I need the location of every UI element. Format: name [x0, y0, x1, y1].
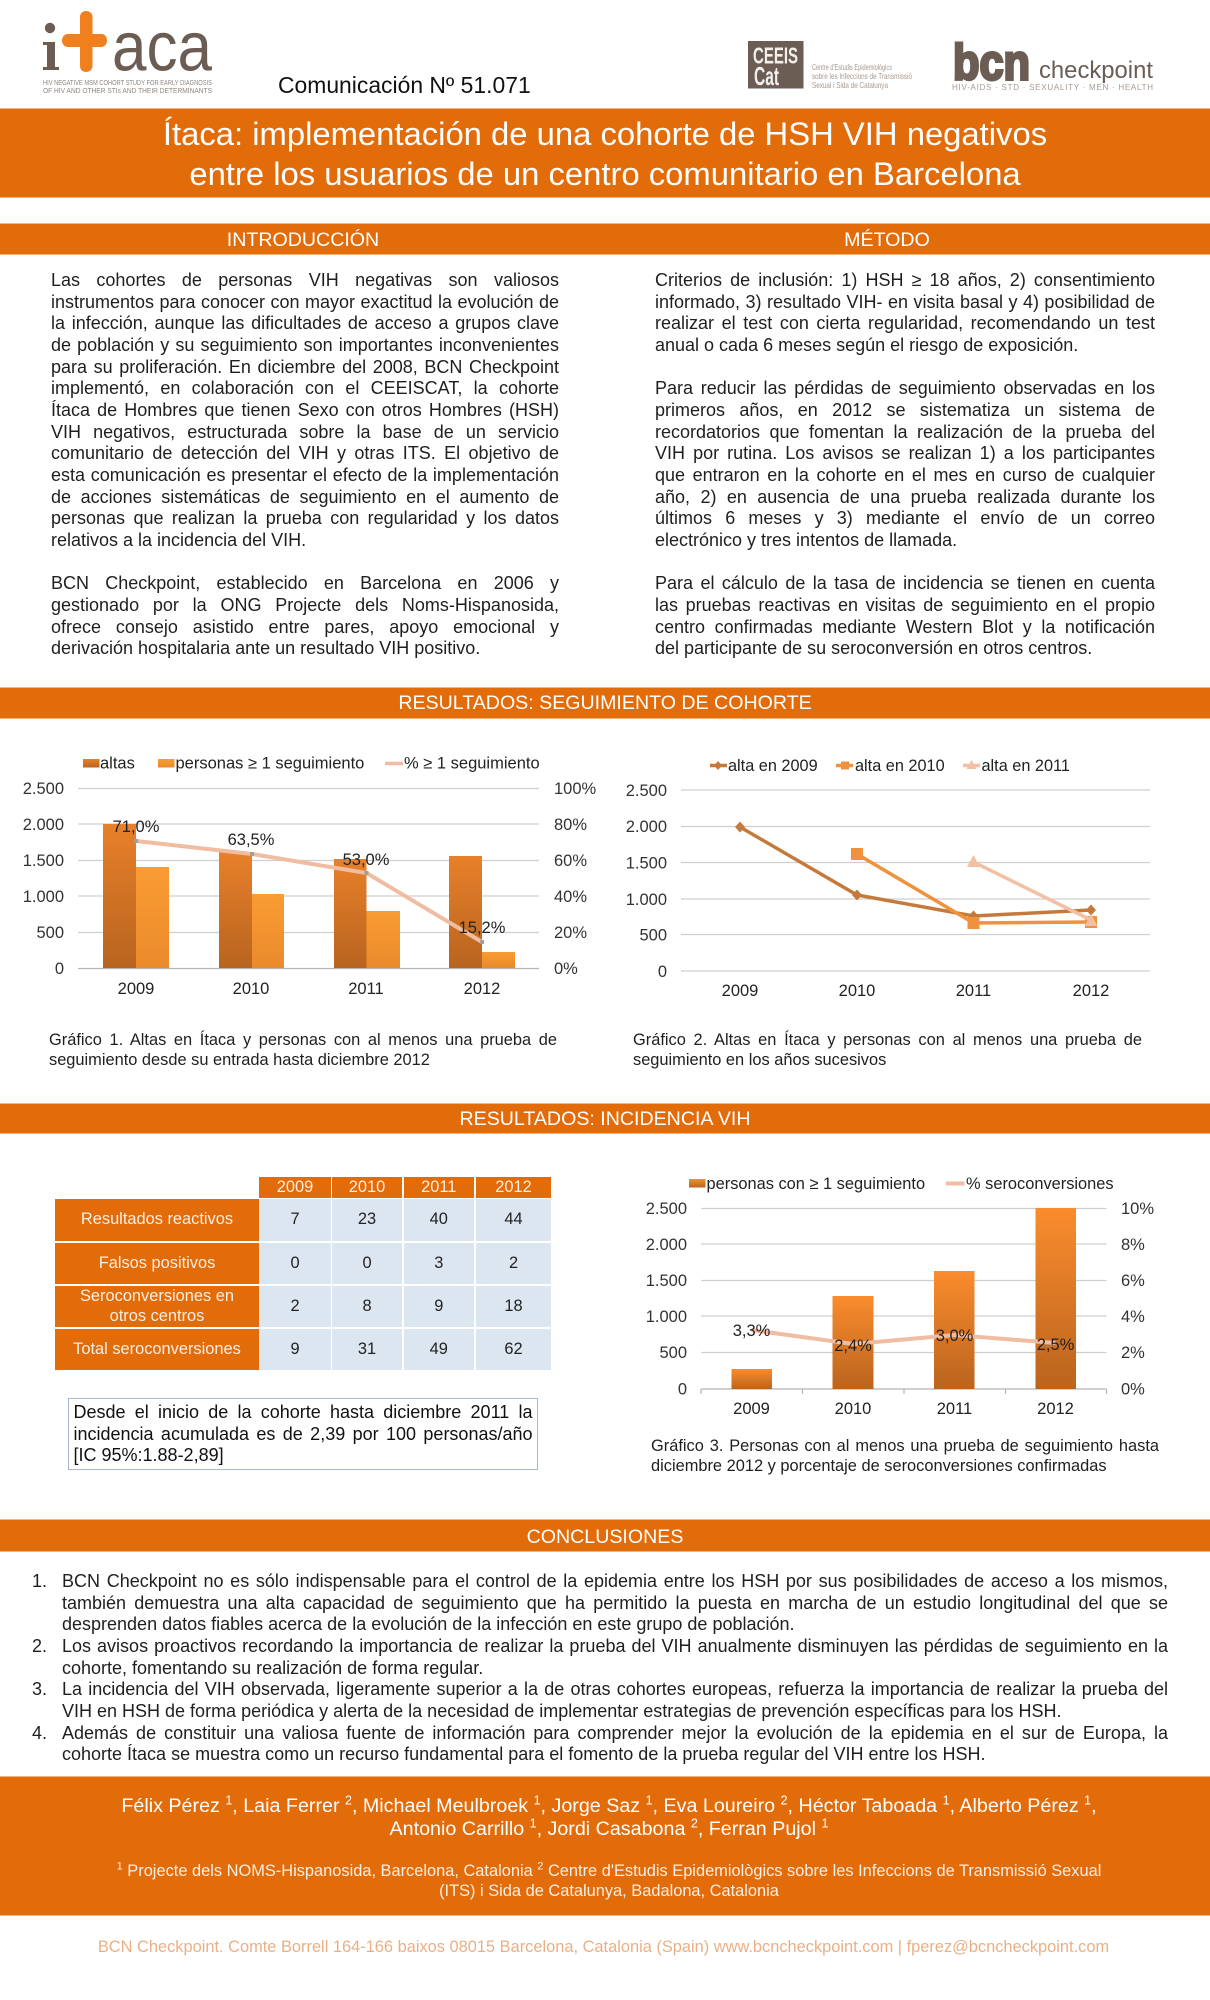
- callout: incidencia acumulada: [68, 1398, 538, 1470]
- left axis: 2.000: [646, 1236, 687, 1254]
- series: alta en 2011: [967, 855, 1098, 926]
- conclusion 4: cohorte Ítaca se muestra como un recurso fundamental para el fomento de la prueba regular del VIH entre los HSH.: [62, 1744, 986, 1764]
- x axis labels: 2012: [1073, 982, 1109, 1000]
- bars: altas: [103, 824, 482, 968]
- conclusion 1: 1.: [32, 1571, 47, 1591]
- left axis: 500: [36, 924, 64, 942]
- row: seroconversiones en otros centros: [55, 1286, 551, 1327]
- legend: alta en 2010: [855, 757, 945, 775]
- row: falsos positivos: [55, 1243, 551, 1284]
- legend: alta en 2009: [728, 757, 818, 775]
- x axis labels: [722, 982, 1109, 1000]
- authors band: [0, 1776, 1210, 1916]
- conclusion 2: cohorte, fomentando su realización de forma regular.: [62, 1658, 483, 1678]
- text block: introducción: ofrece consejo asistido entre pares, apoyo emocional y: [51, 617, 559, 637]
- caption: gráfico 3: [651, 1437, 1159, 1475]
- logo: itaca: aca: [112, 8, 212, 86]
- text block: método: año, 2) en ausencia de una prueba realizada durante los: [655, 487, 1155, 507]
- left axis: 1.500: [646, 1272, 687, 1290]
- logo: CEEISCat: [748, 41, 912, 91]
- legend: [710, 757, 1070, 775]
- text block: método: recordatorios que fomentan la realización de la prueba del: [655, 422, 1155, 442]
- text block: método: VIH por rutina. Los avisos se realizan 1) a los participantes: [655, 443, 1155, 463]
- x axis labels: 2009: [118, 980, 154, 998]
- callout: incidencia acumulada: Desde el inicio de la cohorte hasta diciembre 2011 la: [74, 1402, 532, 1422]
- table header: 2009: [277, 1178, 313, 1196]
- data labels: 71,0%: [113, 818, 160, 836]
- conclusion 2: 2.: [32, 1636, 47, 1656]
- left axis: 1.500: [626, 854, 667, 872]
- text block: método: [655, 270, 1155, 658]
- legend: altas: [100, 754, 135, 772]
- text block: introducción: BCN Checkpoint, establecido en Barcelona en 2006 y: [51, 573, 559, 593]
- data labels: 2,4%: [834, 1337, 872, 1355]
- x axis labels: 2010: [835, 1400, 871, 1418]
- caption: gráfico 2: [633, 1030, 1142, 1069]
- right axis: 0%: [1121, 1380, 1145, 1398]
- text block: introducción: de acciones sistemáticas de seguimiento en el aumento de: [51, 487, 559, 507]
- x axis labels: 2009: [722, 982, 758, 1000]
- right axis: 100%: [554, 780, 597, 798]
- row: resultados reactivos: 23: [358, 1210, 376, 1228]
- left axis: 0: [55, 960, 64, 978]
- caption: gráfico 1: [49, 1030, 557, 1069]
- row: total seroconversiones: 62: [504, 1340, 523, 1358]
- text block: introducción: comunitario de detección del VIH y otras ITS. El objetivo de: [51, 443, 559, 463]
- x axis labels: 2010: [839, 982, 875, 1000]
- title: Ítaca: implementación de una cohorte de HSH VIH negativos: [163, 115, 1047, 152]
- text block: introducción: implementó, en colaboración con el CEEISCAT, la cohorte: [51, 378, 559, 398]
- text block: introducción: derivación hospitalaria ante un resultado VIH positivo.: [51, 638, 480, 658]
- x axis labels: 2012: [1037, 1400, 1074, 1418]
- right axis: 80%: [554, 816, 587, 834]
- right axis: 6%: [1121, 1272, 1145, 1290]
- row: falsos positivos: 0: [290, 1254, 300, 1272]
- affiliations: 1 Projecte dels NOMS-Hispanosida, Barcelona, Catalonia 2 Centre d'Estudis Epidemiològics sobre les Infeccions de Transmissió Sexual: [117, 1861, 1101, 1880]
- row: total seroconversiones: [55, 1329, 551, 1370]
- row: seroconversiones en otros centros: 9: [434, 1297, 443, 1315]
- legend: % ≥ 1 seguimiento: [404, 754, 540, 772]
- conclusion 4: 4.: [32, 1723, 47, 1743]
- left axis: 2.000: [23, 816, 64, 834]
- row: resultados reactivos: Resultados reactivos: [81, 1210, 233, 1228]
- text block: método: del participante de su seroconversión en otros centros.: [655, 638, 1092, 658]
- text block: introducción: esta comunicación es presentar el efecto de la implementación: [51, 465, 559, 485]
- text block: método: anual o cada 6 meses según el riesgo de exposición.: [655, 335, 1078, 355]
- left axis: [23, 780, 64, 978]
- left axis: [646, 1200, 687, 1398]
- row: falsos positivos: 2: [509, 1254, 518, 1272]
- row: seroconversiones en otros centros: 8: [362, 1297, 372, 1315]
- series: alta en 2010: [851, 848, 1097, 929]
- title: entre los usuarios de un centro comunitario en Barcelona: [189, 154, 1021, 192]
- row: total seroconversiones: 9: [290, 1340, 300, 1358]
- text block: método: realizar el test con cierta regularidad, recomendando un test: [655, 313, 1155, 333]
- row: resultados reactivos: 40: [430, 1210, 448, 1228]
- logo: CEEISCat: sobre les Infeccions de Transmissió: [812, 71, 912, 81]
- conclusion 3: [32, 1679, 1168, 1721]
- legend: personas con ≥ 1 seguimiento: [706, 1175, 925, 1193]
- caption: gráfico 3: Gráfico 3. Personas con al menos una prueba de seguimiento hasta: [651, 1437, 1159, 1455]
- row: seroconversiones en otros centros: 2: [290, 1297, 300, 1315]
- text block: método: Criterios de inclusión: 1) HSH ≥ 18 años, 2) consentimiento: [655, 270, 1155, 290]
- right axis: 2%: [1121, 1344, 1145, 1362]
- legend: personas ≥ 1 seguimiento: [176, 754, 364, 772]
- communication number: Comunicación Nº 51.071: [278, 72, 531, 98]
- heading: seguimiento de cohorte: RESULTADOS: SEGUIMIENTO DE COHORTE: [398, 692, 812, 714]
- left axis: 2.000: [626, 818, 667, 836]
- data labels: 53,0%: [343, 851, 390, 869]
- data labels: 3,0%: [936, 1327, 974, 1345]
- conclusion 1: también demuestra una alta capacidad de seguimiento que ha permitido la puesta en marcha de un estudio longitudinal del que se: [62, 1593, 1168, 1613]
- text block: introducción: instrumentos para conocer con mayor exactitud la evolución de: [51, 292, 559, 312]
- affiliations: (ITS) i Sida de Catalunya, Badalona, Catalonia: [439, 1882, 779, 1900]
- section band: resultados incidencia: [0, 1103, 1210, 1134]
- right axis: 10%: [1121, 1200, 1154, 1218]
- left axis: 0: [678, 1380, 687, 1398]
- series: alta en 2009: [735, 822, 1096, 922]
- left axis: 1.000: [646, 1308, 687, 1326]
- text block: método: las pruebas reactivas en visitas de seguimiento en el propio: [655, 595, 1155, 615]
- line: porcentaje: [134, 839, 484, 944]
- text block: introducción: relativos a la incidencia del VIH.: [51, 530, 306, 550]
- text block: introducción: gestionado por la ONG Projecte dels Noms-Hispanosida,: [51, 595, 559, 615]
- text block: introducción: la infección, aunque las dificultades de acceso a grupos clave: [51, 313, 559, 333]
- logo: bcn checkpoint: [952, 34, 1153, 92]
- authors: [121, 1793, 1097, 1840]
- conclusion 1: desprenden datos fiables acerca de la evolución de la infección en este grupo de población.: [62, 1614, 795, 1634]
- caption: gráfico 1: Gráfico 1. Altas en Ítaca y personas con al menos una prueba de: [49, 1031, 557, 1049]
- conclusion 3: 3.: [32, 1679, 47, 1699]
- right axis: 60%: [554, 852, 587, 870]
- caption: gráfico 2: Gráfico 2. Altas en Ítaca y personas con al menos una prueba de: [633, 1031, 1142, 1049]
- chart 2: altas por año: [626, 757, 1150, 1000]
- row: falsos positivos: 3: [434, 1254, 443, 1272]
- text block: introducción: VIH negativos, estructurada sobre la base de un servicio: [51, 422, 559, 442]
- left axis: 2.500: [626, 782, 667, 800]
- text block: introducción: de población y su seguimiento son importantes inconvenientes: [51, 335, 559, 355]
- left axis: 1.500: [23, 852, 64, 870]
- row: seroconversiones en otros centros: otros centros: [110, 1306, 204, 1324]
- data labels: [113, 818, 506, 937]
- left axis: 1.000: [626, 891, 667, 909]
- conclusion 3: La incidencia del VIH observada, ligeramente superior a la de otras cohortes europeas, refuerza la importancia de realizar la prueba del: [62, 1679, 1168, 1699]
- authors: Félix Pérez 1, Laia Ferrer 2, Michael Meulbroek 1, Jorge Saz 1, Eva Loureiro 2, Héctor Taboada 1, Alberto Pérez 1,: [121, 1793, 1097, 1816]
- legend: [83, 754, 540, 772]
- conclusion 3: VIH en HSH de forma periódica y alerta de la necesidad de implementar estrategias de prevención específicas para los HSH.: [62, 1701, 1062, 1721]
- conclusion 2: [32, 1636, 1168, 1678]
- title banner: [0, 108, 1210, 198]
- conclusion 4: Además de constituir una valiosa fuente de información para comprender mejor la evolución de la epidemia en el sur de Europa, la: [62, 1723, 1168, 1743]
- authors: Antonio Carrillo 1, Jordi Casabona 2, Ferran Pujol 1: [390, 1816, 828, 1840]
- x axis labels: 2011: [937, 1400, 972, 1418]
- text block: introducción: [51, 270, 559, 658]
- text block: método: informado, 3) resultado VIH- en visita basal y 4) posibilidad de: [655, 292, 1155, 312]
- text block: introducción: para su proliferación. En diciembre del 2008, BCN Checkpoint: [51, 357, 559, 377]
- text block: método: Para reducir las pérdidas de seguimiento observadas en los: [655, 378, 1155, 398]
- row: resultados reactivos: 44: [504, 1210, 523, 1228]
- text block: conclusiones: [32, 1571, 1168, 1764]
- x axis labels: 2011: [348, 980, 384, 998]
- row: resultados reactivos: 7: [290, 1210, 300, 1228]
- chart 3: personas y seroconversiones: [646, 1175, 1154, 1418]
- heading: método: MÉTODO: [844, 229, 930, 251]
- heading: introducción: INTRODUCCIÓN: [227, 229, 379, 251]
- row: total seroconversiones: 31: [358, 1340, 376, 1358]
- left axis: 2.500: [646, 1200, 687, 1218]
- logo: CEEISCat: Centre d'Estudis Epidemiològics: [812, 62, 892, 72]
- data labels: [733, 1322, 1075, 1355]
- callout: incidencia acumulada: [IC 95%:1.88-2,89]: [74, 1445, 224, 1465]
- text block: método: primeros años, en 2012 se sistematiza un sistema de: [655, 400, 1155, 420]
- row: falsos positivos: 0: [362, 1254, 372, 1272]
- logo: CEEISCat: CEEIS: [753, 42, 798, 68]
- table header: [259, 1177, 551, 1198]
- data labels: 15,2%: [459, 919, 506, 937]
- text block: método: Para el cálculo de la tasa de incidencia se tienen en cuenta: [655, 573, 1155, 593]
- x axis labels: 2009: [733, 1400, 770, 1418]
- logo: bcn checkpoint: HIV-AIDS · STD · SEXUALITY · MEN · HEALTH: [952, 83, 1153, 92]
- table header: 2010: [349, 1178, 385, 1196]
- logo: itaca: OF HIV AND OTHER STIs AND THEIR DETERMINANTS: [43, 86, 212, 95]
- caption: gráfico 1: seguimiento desde su entrada hasta diciembre 2012: [49, 1051, 430, 1069]
- x axis labels: 2010: [233, 980, 269, 998]
- row: resultados reactivos: [55, 1199, 551, 1241]
- x axis labels: 2011: [956, 982, 991, 1000]
- data labels: 63,5%: [228, 831, 275, 849]
- conclusion 2: Los avisos proactivos recordando la importancia de realizar la prueba del VIH anualmente disminuyen las pérdidas de seguimiento en la: [62, 1636, 1168, 1656]
- footer contact: BCN Checkpoint. Comte Borrell 164-166 baixos 08015 Barcelona, Catalonia (Spain) www.bcncheckpoint.com | fperez@bcncheckpoint.com: [98, 1938, 1109, 1956]
- conclusion 4: [32, 1723, 1168, 1764]
- logo: itaca: [43, 8, 212, 95]
- right axis: 20%: [554, 924, 587, 942]
- table header: 2011: [421, 1178, 456, 1196]
- x axis labels: [733, 1400, 1074, 1418]
- title: [163, 115, 1047, 192]
- conclusion 1: BCN Checkpoint no es sólo indispensable para el control de la epidemia entre los HSH por sus posibilidades de acceso a los mismos,: [62, 1571, 1168, 1591]
- logo: CEEISCat: Sexual i Sida de Catalunya: [812, 80, 888, 90]
- row: total seroconversiones: Total seroconversiones: [73, 1340, 241, 1358]
- section band: conclusiones: [0, 1519, 1210, 1552]
- logo: bcn checkpoint: bcn: [953, 34, 1030, 90]
- text block: método: electrónico y tres intentos de llamada.: [655, 530, 957, 550]
- row: falsos positivos: Falsos positivos: [99, 1254, 215, 1272]
- text block: método: que entraron en la cohorte en el mes en curso de cualquier: [655, 465, 1155, 485]
- chart 1: altas y seguimiento: [23, 754, 597, 998]
- data labels: 3,3%: [733, 1322, 771, 1340]
- row: seroconversiones en otros centros: Seroconversiones en: [80, 1287, 234, 1305]
- left axis: [626, 782, 667, 981]
- heading: conclusiones: CONCLUSIONES: [527, 1526, 683, 1548]
- section band: introducción y método: [0, 223, 1210, 255]
- legend: alta en 2011: [982, 757, 1070, 775]
- callout: incidencia acumulada: incidencia acumulada es de 2,39 por 100 personas/año: [74, 1424, 532, 1444]
- section band: resultados seguimiento: [0, 687, 1210, 719]
- line: seroconversiones: [752, 1330, 1056, 1344]
- text block: introducción: Las cohortes de personas VIH negativas son valiosos: [51, 270, 559, 290]
- legend: % seroconversiones: [966, 1175, 1114, 1193]
- conclusion 1: [32, 1571, 1168, 1634]
- logo: CEEISCat: Cat: [754, 61, 779, 91]
- logo: itaca: HIV NEGATIVE MSM COHORT STUDY FOR EARLY DIAGNOSIS: [43, 78, 212, 87]
- legend: [689, 1175, 1114, 1193]
- table header: 2012: [495, 1178, 532, 1196]
- bars: [732, 1208, 1076, 1389]
- right axis: [1121, 1200, 1154, 1398]
- row: total seroconversiones: 49: [430, 1340, 448, 1358]
- left axis: 500: [659, 1344, 687, 1362]
- table: seroconversiones: [55, 1177, 551, 1370]
- text block: método: centro confirmadas mediante Western Blot y la notificación: [655, 617, 1155, 637]
- x axis labels: [118, 980, 500, 998]
- right axis: [554, 780, 597, 978]
- caption: gráfico 2: seguimiento en los años sucesivos: [633, 1051, 886, 1069]
- text block: método: últimos 6 meses y 3) mediante el envío de un correo: [655, 508, 1155, 528]
- left axis: 1.000: [23, 888, 64, 906]
- heading: incidencia VIH: RESULTADOS: INCIDENCIA VIH: [459, 1108, 751, 1130]
- right axis: 0%: [554, 960, 578, 978]
- row: seroconversiones en otros centros: 18: [504, 1297, 523, 1315]
- logo: bcn checkpoint: checkpoint: [1039, 57, 1153, 84]
- right axis: 40%: [554, 888, 587, 906]
- right axis: 4%: [1121, 1308, 1145, 1326]
- bars: personas con seguimiento: [136, 867, 515, 968]
- caption: gráfico 3: diciembre 2012 y porcentaje de seroconversiones confirmadas: [651, 1457, 1107, 1475]
- right axis: 8%: [1121, 1236, 1145, 1254]
- left axis: 500: [639, 926, 667, 944]
- text block: introducción: Ítaca de Hombres que tienen Sexo con otros Hombres (HSH): [51, 400, 559, 420]
- affiliations: [117, 1861, 1101, 1900]
- data labels: 2,5%: [1037, 1336, 1075, 1354]
- left axis: 2.500: [23, 780, 64, 798]
- x axis labels: 2012: [464, 980, 500, 998]
- left axis: 0: [658, 963, 667, 981]
- text block: introducción: personas que realizan la prueba con regularidad y los datos: [51, 508, 559, 528]
